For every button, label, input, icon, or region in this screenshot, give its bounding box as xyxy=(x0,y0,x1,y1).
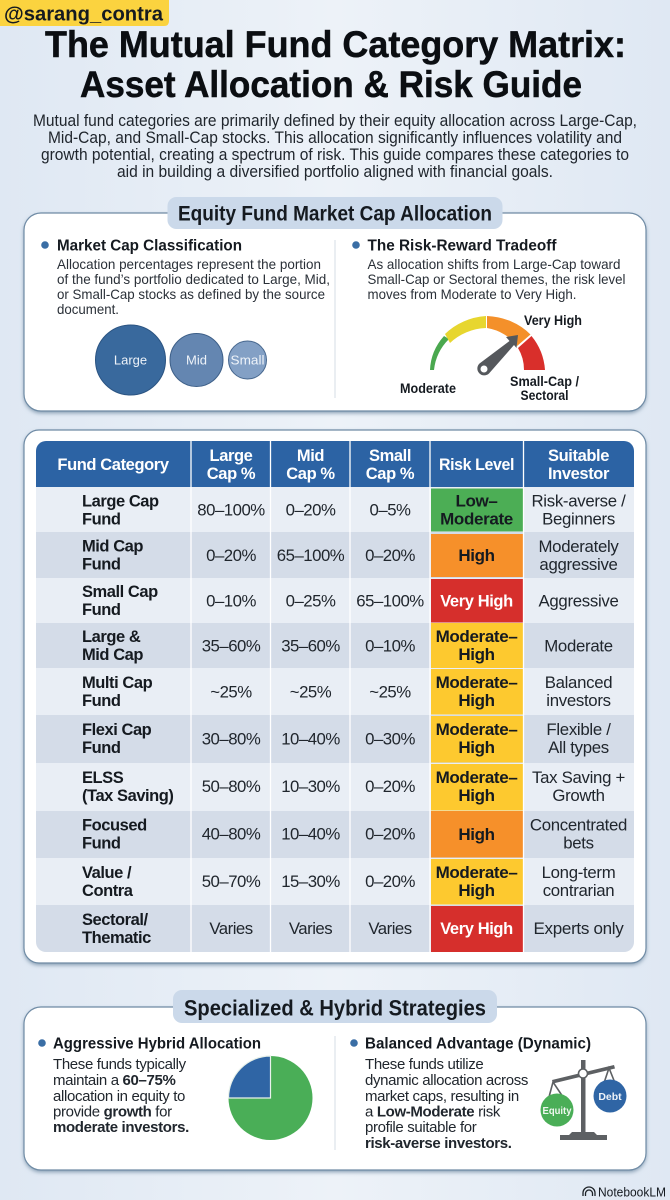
row: large and mid cap: Large & xyxy=(82,628,141,646)
row: small cap fund: Fund xyxy=(82,601,121,619)
block: aggressive hybrid allocation xyxy=(38,1036,261,1136)
row: mid cap fund: Mid Cap xyxy=(82,538,143,556)
row: large and mid cap: Moderate– xyxy=(436,627,517,646)
table header: Cap % xyxy=(207,465,256,483)
row: value contra: Moderate– xyxy=(436,863,517,882)
row: small cap fund: 0–10% xyxy=(206,592,256,610)
row: value contra: 0–20% xyxy=(365,872,415,891)
row: focused fund: 40–80% xyxy=(202,824,261,844)
row: flexi cap fund: Fund xyxy=(82,739,121,757)
block: aggressive hybrid allocation: moderate investors. xyxy=(53,1119,189,1136)
intro text: growth potential, creating a spectrum of risk. This guide compares these categories to xyxy=(41,146,629,164)
row: sectoral thematic: Thematic xyxy=(82,929,151,947)
intro text: aid in building a diversified portfolio aligned with financial goals. xyxy=(117,163,553,181)
row: multi cap fund: Balanced xyxy=(545,673,612,692)
block: balanced advantage dynamic: risk-averse investors. xyxy=(365,1135,512,1152)
row: sectoral thematic xyxy=(36,905,634,952)
row: elss tax saving xyxy=(36,763,634,811)
title: The Mutual Fund Category Matrix: xyxy=(45,24,626,65)
row: sectoral thematic: Experts only xyxy=(534,919,624,938)
row: flexi cap fund: All types xyxy=(548,738,609,757)
block: aggressive hybrid allocation: Aggressive Hybrid Allocation xyxy=(53,1036,261,1052)
table header xyxy=(36,441,634,487)
row: large cap fund: Beginners xyxy=(542,510,615,528)
block: balanced advantage dynamic xyxy=(350,1036,591,1152)
row: large and mid cap xyxy=(36,623,634,668)
row: large and mid cap: Mid Cap xyxy=(82,646,143,664)
block: the risk-reward tradeoff: The Risk-Reward Tradeoff xyxy=(368,238,557,254)
needle xyxy=(477,335,518,375)
heading: equity fund market cap allocation: Equity Fund Market Cap Allocation xyxy=(178,202,492,226)
handle badge: @sarang_contra xyxy=(4,4,164,26)
row: flexi cap fund: 10–40% xyxy=(281,730,340,748)
row: large cap fund: 80–100% xyxy=(197,500,265,520)
row: small cap fund: Aggressive xyxy=(538,592,619,610)
row: elss tax saving: (Tax Saving) xyxy=(82,787,173,805)
panel: specialized and hybrid strategies xyxy=(24,990,646,1172)
row: elss tax saving: ELSS xyxy=(82,769,124,787)
gauge: risk level xyxy=(400,312,582,403)
row: large and mid cap: 35–60% xyxy=(202,636,261,656)
row: mid cap fund: Moderately xyxy=(538,537,619,556)
table header: Mid xyxy=(297,447,324,465)
row: focused fund: High xyxy=(458,825,495,844)
row: large cap fund: Large Cap xyxy=(82,492,159,510)
block: balanced advantage dynamic: profile suitable for xyxy=(365,1119,477,1136)
table header: Cap % xyxy=(286,465,335,483)
block: the risk-reward tradeoff: Small-Cap or Sectoral themes, the risk level xyxy=(368,271,626,287)
block: market cap classification: Allocation percentages represent the portion xyxy=(57,256,321,272)
intro text: Mid-Cap, and Small-Cap stocks. This allocation significantly influences volatility and xyxy=(48,129,622,147)
icon: balance scale equity and debt: Debt xyxy=(598,1091,622,1103)
row: value contra: High xyxy=(458,881,495,900)
block: aggressive hybrid allocation: maintain a 60–75% xyxy=(53,1072,175,1089)
row: value contra: Contra xyxy=(82,882,134,900)
row: small cap fund: Very High xyxy=(440,592,513,610)
table header: Suitable xyxy=(548,447,609,465)
row: mid cap fund: Fund xyxy=(82,556,121,574)
block: the risk-reward tradeoff xyxy=(352,238,626,302)
row: small cap fund: 65–100% xyxy=(356,592,424,610)
row: sectoral thematic: Sectoral/ xyxy=(82,911,149,929)
row: multi cap fund: ~25% xyxy=(290,682,332,702)
table header: Large xyxy=(210,447,253,465)
title: Asset Allocation & Risk Guide xyxy=(80,64,582,105)
bubble chart: large, mid, small: Mid xyxy=(186,352,207,368)
icon: balance scale equity and debt xyxy=(540,1060,626,1140)
row: sectoral thematic: Varies xyxy=(368,919,412,938)
row: mid cap fund: 0–20% xyxy=(365,546,415,565)
table header: Cap % xyxy=(366,465,415,483)
row: multi cap fund: ~25% xyxy=(369,682,411,702)
block: aggressive hybrid allocation: These funds typically xyxy=(53,1056,187,1073)
block: market cap classification: Market Cap Classification xyxy=(57,238,242,254)
row: large cap fund: Moderate xyxy=(440,510,513,528)
row: value contra xyxy=(36,858,634,905)
row: elss tax saving: Growth xyxy=(552,786,605,805)
row: small cap fund: 0–25% xyxy=(286,592,336,610)
row: large cap fund: 0–5% xyxy=(370,500,411,520)
table header: Fund Category xyxy=(57,456,170,474)
row: elss tax saving: 10–30% xyxy=(281,777,340,796)
panel: equity fund market cap allocation xyxy=(24,197,646,413)
row: focused fund xyxy=(36,811,634,858)
block: the risk-reward tradeoff: As allocation shifts from Large-Cap toward xyxy=(368,256,620,272)
row: value contra: Value / xyxy=(82,864,132,882)
row: sectoral thematic: Very High xyxy=(440,920,513,938)
gauge: risk level: Sectoral xyxy=(520,388,568,403)
row: mid cap fund: 65–100% xyxy=(277,546,345,565)
row: elss tax saving: 50–80% xyxy=(202,777,261,796)
row: mid cap fund: High xyxy=(458,546,495,565)
icon: balance scale equity and debt: Equity xyxy=(542,1105,572,1117)
row: flexi cap fund: 0–30% xyxy=(365,730,415,748)
row: value contra: 50–70% xyxy=(202,872,261,891)
row: multi cap fund: Multi Cap xyxy=(82,674,153,692)
table header: Small xyxy=(369,447,411,465)
row: multi cap fund: ~25% xyxy=(210,682,252,702)
row: multi cap fund: Fund xyxy=(82,692,121,710)
row: focused fund: 0–20% xyxy=(365,824,415,844)
footer: notebooklm mark: NotebookLM xyxy=(598,1184,666,1200)
row: large cap fund: Low– xyxy=(455,492,498,510)
block: balanced advantage dynamic: These funds utilize xyxy=(365,1056,483,1073)
panel: fund category matrix xyxy=(24,430,646,965)
row: sectoral thematic: Varies xyxy=(209,919,253,938)
comparison table xyxy=(36,441,634,952)
row: focused fund: Concentrated xyxy=(530,816,627,834)
row: large cap fund: 0–20% xyxy=(286,500,336,520)
row: large cap fund: Risk-averse / xyxy=(531,492,626,510)
row: flexi cap fund xyxy=(36,715,634,763)
block: market cap classification: or Small-Cap stocks as defined by the source xyxy=(57,286,325,302)
block: balanced advantage dynamic: dynamic allocation across xyxy=(365,1072,528,1089)
block: the risk-reward tradeoff: moves from Moderate to Very High. xyxy=(368,286,576,302)
block: balanced advantage dynamic: Balanced Advantage (Dynamic) xyxy=(365,1036,591,1052)
gauge: risk level: Moderate xyxy=(400,380,456,396)
heading: specialized and hybrid strategies: Specialized & Hybrid Strategies xyxy=(184,996,486,1020)
block: aggressive hybrid allocation: provide growth for xyxy=(53,1104,172,1120)
row: focused fund: bets xyxy=(563,834,594,852)
row: small cap fund xyxy=(36,578,634,623)
block: market cap classification xyxy=(41,238,330,317)
row: elss tax saving: Moderate– xyxy=(436,768,517,787)
row: flexi cap fund: Moderate– xyxy=(436,720,517,739)
row: flexi cap fund: Flexi Cap xyxy=(82,721,152,739)
row: focused fund: Focused xyxy=(82,816,147,834)
row: elss tax saving: 0–20% xyxy=(365,777,415,796)
block: market cap classification: of the fund’s portfolio dedicated to Large, Mid, xyxy=(57,271,330,287)
row: focused fund: 10–40% xyxy=(281,824,340,844)
row: large and mid cap: High xyxy=(458,645,495,664)
row: small cap fund: Small Cap xyxy=(82,583,158,601)
row: multi cap fund: investors xyxy=(546,691,611,710)
block: balanced advantage dynamic: a Low-Moderate risk xyxy=(365,1104,501,1120)
block: market cap classification: document. xyxy=(57,301,119,317)
row: large cap fund: Fund xyxy=(82,510,121,528)
row: flexi cap fund: 30–80% xyxy=(202,730,261,748)
row: value contra: Long-term xyxy=(542,863,615,882)
table header: Risk Level xyxy=(439,456,514,474)
row: mid cap fund xyxy=(36,532,634,578)
row: multi cap fund: Moderate– xyxy=(436,673,517,692)
row: flexi cap fund: Flexible / xyxy=(546,720,611,739)
row: multi cap fund: High xyxy=(458,691,495,710)
row: elss tax saving: High xyxy=(458,786,495,805)
gauge: risk level: Small-Cap / xyxy=(510,374,579,389)
intro text xyxy=(33,112,637,181)
row: sectoral thematic: Varies xyxy=(289,919,332,938)
row: elss tax saving: Tax Saving + xyxy=(532,768,625,787)
title xyxy=(45,24,626,105)
pie chart: equity allocation xyxy=(228,1056,312,1140)
row: flexi cap fund: High xyxy=(458,738,495,757)
row: value contra: 15–30% xyxy=(281,872,340,891)
row: mid cap fund: 0–20% xyxy=(206,546,256,565)
bubble chart: large, mid, small xyxy=(96,325,266,395)
bubble chart: large, mid, small: Small xyxy=(230,354,264,368)
row: value contra: contrarian xyxy=(543,881,614,900)
intro text: Mutual fund categories are primarily defined by their equity allocation across Large-Cap, xyxy=(33,112,637,130)
row: large cap fund xyxy=(36,487,634,532)
block: balanced advantage dynamic: market caps, resulting in xyxy=(365,1088,519,1105)
row: large and mid cap: 0–10% xyxy=(365,636,415,656)
row: focused fund: Fund xyxy=(82,834,121,852)
heading: equity fund market cap allocation xyxy=(168,197,502,229)
table header: Investor xyxy=(548,465,610,483)
gauge: risk level: Very High xyxy=(524,312,582,328)
row: multi cap fund xyxy=(36,668,634,715)
block: aggressive hybrid allocation: allocation in equity to xyxy=(53,1088,185,1105)
row: mid cap fund: aggressive xyxy=(539,555,618,574)
bubble chart: large, mid, small: Large xyxy=(114,352,147,368)
row: large and mid cap: 35–60% xyxy=(281,636,340,656)
row: large and mid cap: Moderate xyxy=(544,636,613,656)
